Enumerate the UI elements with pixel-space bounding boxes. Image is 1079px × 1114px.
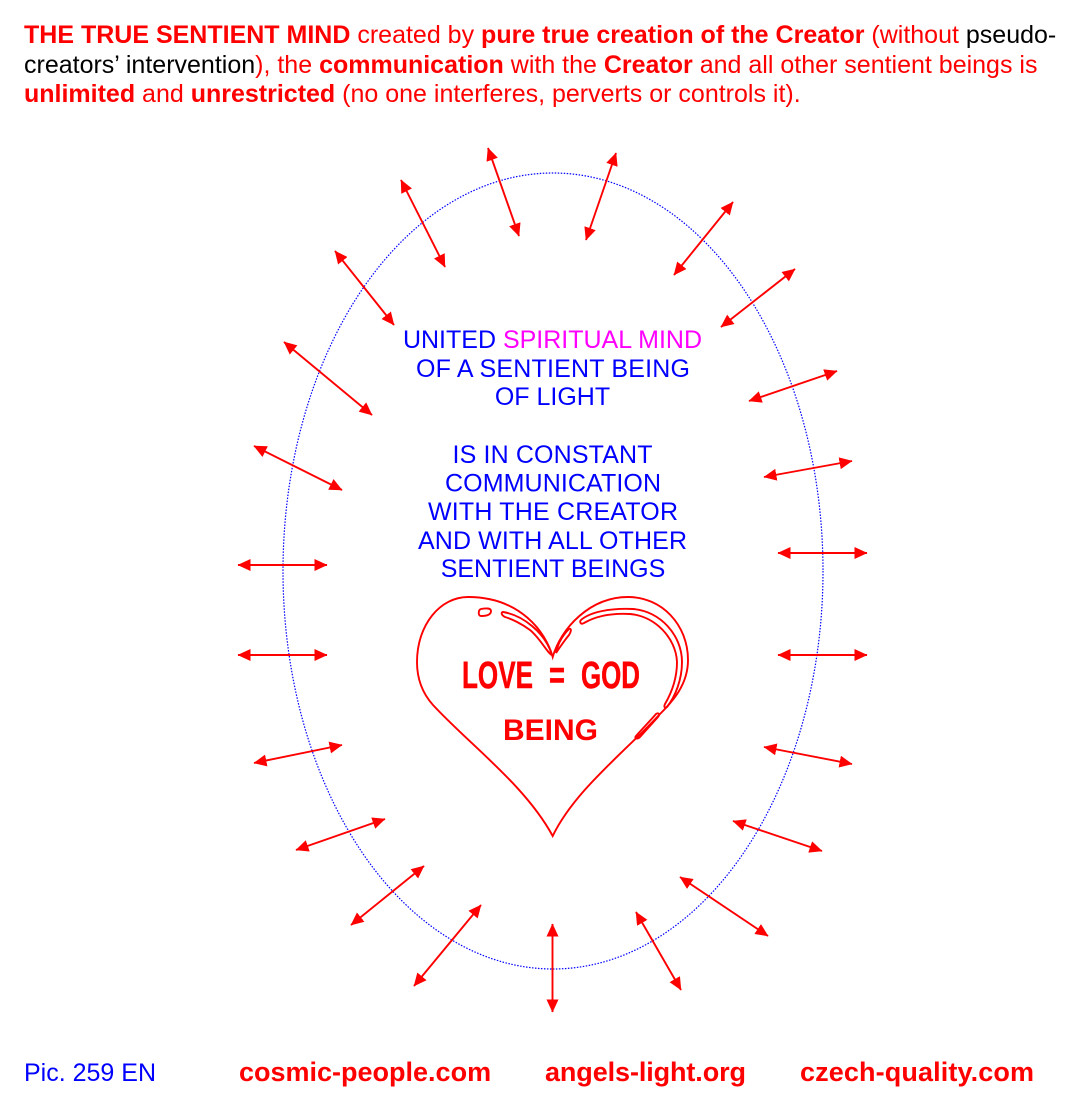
heart text: LOVE = GOD: GOD: [581, 655, 640, 697]
footer picture label: Pic. 259 EN: [24, 1059, 156, 1087]
central blue text: [403, 326, 702, 583]
footer websites: angels-light.org: [545, 1057, 746, 1087]
heart text: LOVE = GOD: [462, 655, 640, 697]
title text: creators’ intervention), the communication with the Creator and all other sentient beings is: [24, 51, 1037, 79]
central blue text: UNITED SPIRITUAL MIND: [403, 326, 702, 354]
heart text: LOVE = GOD: =: [549, 655, 565, 697]
heart text: BEING: BEING: [503, 714, 598, 747]
central blue text: COMMUNICATION: [445, 470, 661, 498]
title text: [24, 21, 1056, 108]
heart text: LOVE = GOD: LOVE: [462, 655, 533, 697]
footer websites: cosmic-people.com: [239, 1057, 491, 1087]
radiating communication arrows: [238, 148, 867, 1012]
footer websites: czech-quality.com: [800, 1057, 1034, 1087]
dotted blue ellipse: mind boundary: [283, 173, 823, 969]
central blue text: AND WITH ALL OTHER: [418, 527, 687, 555]
title text: unlimited and unrestricted (no one interferes, perverts or controls it).: [24, 80, 801, 108]
central blue text: OF LIGHT: [495, 383, 610, 411]
title text: THE TRUE SENTIENT MIND created by pure true creation of the Creator (without pseudo-: [24, 21, 1056, 49]
central blue text: OF A SENTIENT BEING: [416, 355, 690, 383]
central blue text: SENTIENT BEINGS: [441, 555, 665, 583]
central blue text: WITH THE CREATOR: [428, 498, 678, 526]
central blue text: IS IN CONSTANT: [452, 441, 652, 469]
footer websites: [239, 1057, 1034, 1087]
heart: [417, 597, 688, 836]
